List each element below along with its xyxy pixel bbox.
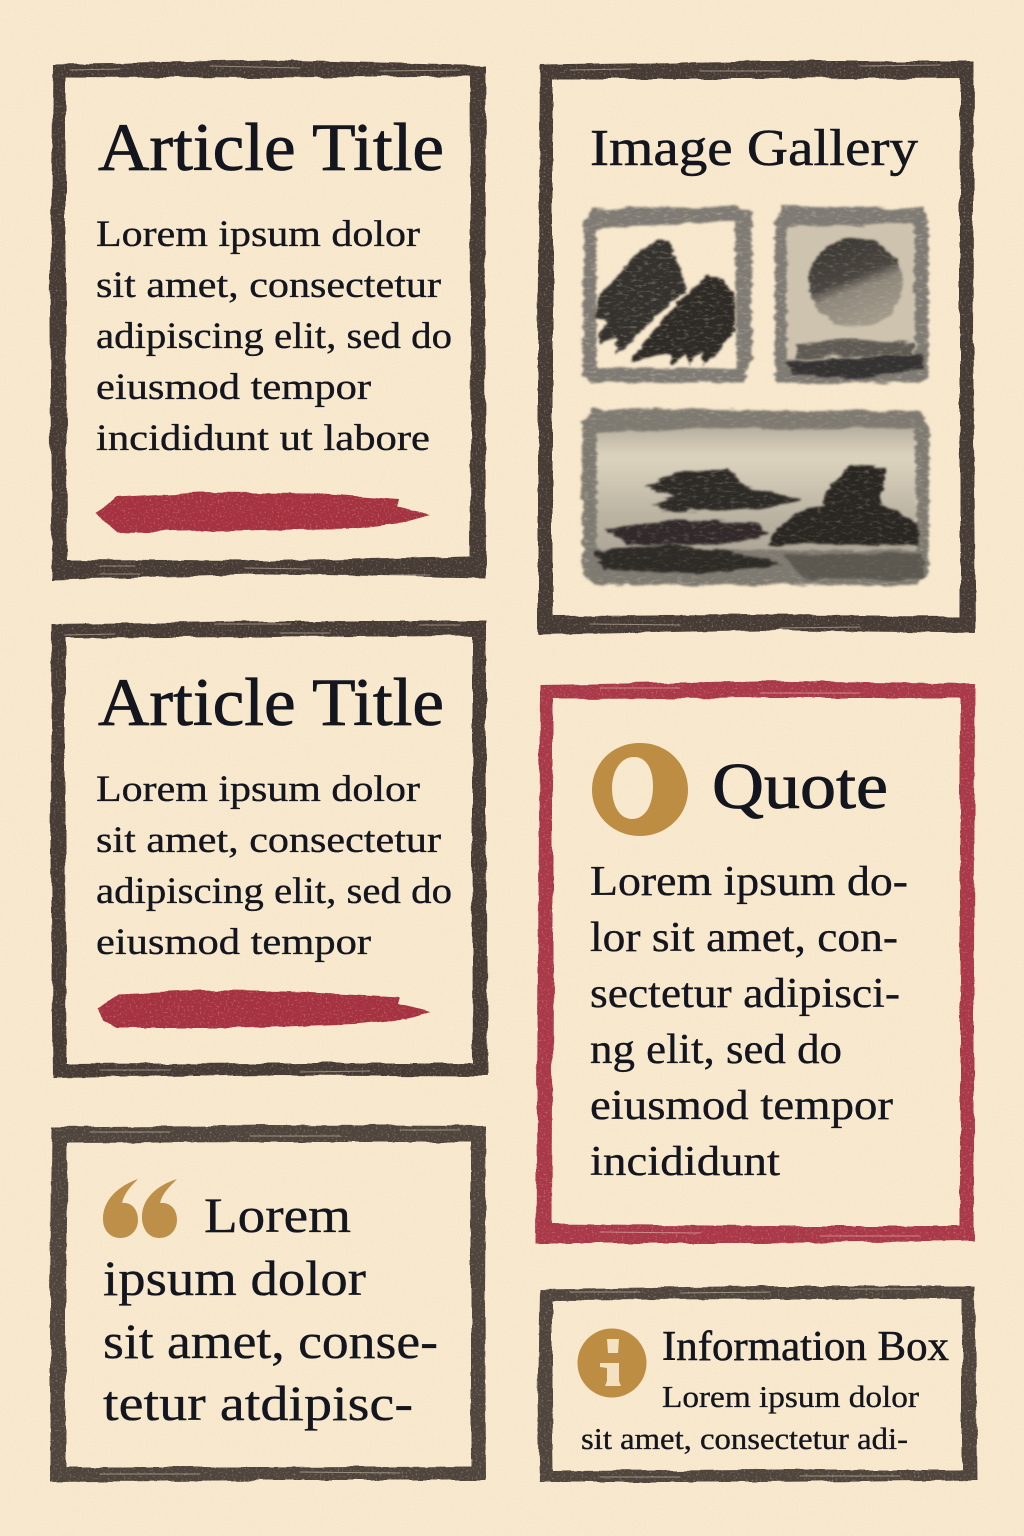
pull quote text: sit amet, conse- — [103, 1313, 438, 1369]
pull quote text — [103, 1187, 438, 1431]
article two body — [96, 769, 452, 963]
featured quote text: Lorem ipsum do- — [590, 859, 908, 905]
article two body: adipiscing elit, sed do — [96, 871, 452, 912]
information box text — [581, 1379, 920, 1456]
article two red brush stroke — [99, 990, 430, 1028]
icon: information — [578, 1328, 646, 1398]
featured quote text: lor sit amet, con- — [590, 915, 898, 961]
article one body: eiusmod tempor — [96, 367, 371, 408]
information box frame — [538, 1286, 977, 1482]
article one frame — [50, 60, 486, 580]
gallery images, coordinates in 3x crop space — [582, 206, 929, 585]
article two title: Article Title — [98, 664, 444, 740]
featured quote text: incididunt — [590, 1139, 780, 1185]
panel: article one — [50, 60, 486, 580]
information box heading: Information Box — [662, 1324, 949, 1370]
pull quote frame — [50, 1125, 486, 1482]
article two frame — [51, 621, 488, 1078]
article two body: eiusmod tempor — [96, 922, 371, 963]
featured quote text — [590, 859, 908, 1185]
article one body: incididunt ut labore — [96, 418, 430, 459]
article one body: Lorem ipsum dolor — [96, 214, 420, 255]
panel: image gallery — [538, 61, 976, 635]
pull quote text: tetur atdipisc- — [103, 1375, 413, 1431]
information box text: sit amet, consectetur adi- — [581, 1421, 908, 1456]
icon: gold ring — [592, 743, 688, 836]
information box text: Lorem ipsum dolor — [662, 1379, 920, 1414]
pull quote text: ipsum dolor — [103, 1250, 366, 1306]
article one body: adipiscing elit, sed do — [96, 316, 452, 357]
featured quote text: eiusmod tempor — [590, 1083, 893, 1129]
featured quote text: sectetur adipisci- — [590, 971, 900, 1017]
image: mountains — [583, 206, 752, 383]
gallery heading: Image Gallery — [590, 120, 918, 177]
article one title: Article Title — [98, 109, 444, 185]
icon: quotation marks — [103, 1179, 177, 1238]
panel: information box — [538, 1286, 977, 1482]
featured quote red frame — [536, 681, 975, 1243]
image: moon over water — [775, 207, 928, 383]
panel: featured quote — [536, 681, 975, 1243]
article one body: sit amet, consectetur — [96, 265, 441, 306]
pull quote text: Lorem — [204, 1187, 351, 1243]
article two body: sit amet, consectetur — [96, 820, 441, 861]
article one red brush stroke — [97, 492, 430, 532]
panel: pull quote — [50, 1125, 486, 1482]
featured quote text: ng elit, sed do — [590, 1027, 842, 1073]
featured quote heading: Quote — [712, 750, 888, 823]
panel: article two — [51, 621, 488, 1078]
article one body — [96, 214, 452, 459]
gallery frame — [538, 61, 976, 635]
image: misty landscape — [582, 408, 929, 585]
article two body: Lorem ipsum dolor — [96, 769, 420, 810]
